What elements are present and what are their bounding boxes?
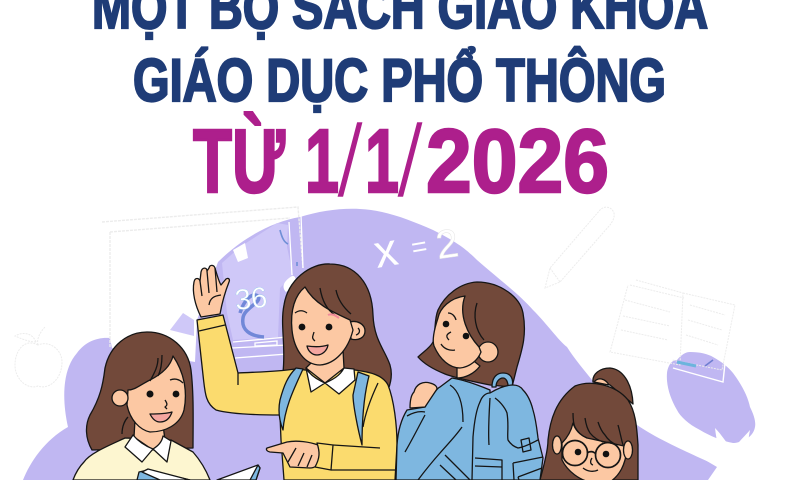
backpack bbox=[472, 385, 543, 480]
mouth bbox=[307, 345, 328, 355]
title line 2: GIÁO DỤC PHỔ THÔNG bbox=[133, 47, 666, 114]
face bbox=[562, 423, 627, 480]
collar bbox=[306, 368, 355, 394]
eyes bbox=[146, 390, 179, 398]
hair bbox=[418, 282, 524, 387]
title date: 1 bbox=[305, 112, 339, 212]
pointing hand bbox=[266, 441, 321, 468]
ear bbox=[350, 321, 365, 340]
face bbox=[292, 287, 353, 365]
neck bbox=[306, 350, 344, 383]
faint doodles bbox=[15, 207, 735, 387]
doodle: open book bbox=[610, 280, 735, 370]
student: middle girl raising hand bbox=[193, 264, 397, 480]
hair bbox=[86, 332, 193, 450]
sweater bbox=[73, 438, 210, 480]
ears bbox=[552, 436, 562, 454]
title date: / bbox=[396, 103, 425, 220]
chalk formula: = bbox=[409, 231, 430, 263]
eyes bbox=[575, 449, 609, 457]
doodle: apple bbox=[15, 327, 62, 387]
face bbox=[433, 296, 481, 368]
ear bbox=[478, 342, 498, 362]
title date: / bbox=[336, 103, 365, 220]
title date: TỪ bbox=[193, 111, 285, 212]
open book bbox=[137, 465, 260, 480]
student: left girl with book bbox=[73, 332, 260, 480]
blue jacket bbox=[396, 378, 490, 480]
backpack handle bbox=[492, 373, 513, 387]
chalkboard bbox=[102, 207, 303, 358]
mouth bbox=[150, 412, 172, 422]
title date: 1 bbox=[365, 112, 399, 212]
hair bun bbox=[593, 368, 633, 404]
collar bbox=[125, 435, 171, 462]
title date bbox=[193, 103, 609, 220]
hair bbox=[283, 264, 391, 390]
doodle: pencil bbox=[545, 207, 614, 288]
eyes bbox=[299, 324, 332, 330]
hair bbox=[540, 383, 638, 480]
hand on strap bbox=[410, 382, 437, 408]
student: girl with glasses bbox=[540, 368, 638, 480]
chalk formula: x bbox=[370, 223, 401, 278]
neck bbox=[457, 358, 480, 378]
title bbox=[92, 0, 708, 220]
background purple blobs bbox=[23, 209, 755, 480]
chalk formula: 2 bbox=[433, 221, 461, 268]
chalk numbers: 36 bbox=[233, 282, 269, 317]
chalk formula bbox=[370, 221, 461, 278]
cuff bbox=[315, 443, 333, 470]
title date: 2026 bbox=[426, 112, 609, 212]
student: right girl with backpack bbox=[396, 282, 543, 480]
backpack straps bbox=[279, 368, 303, 430]
neck bbox=[134, 420, 165, 450]
yellow sweater bbox=[197, 315, 397, 480]
raised hand bbox=[193, 265, 229, 317]
eyes bbox=[443, 321, 469, 339]
glasses bbox=[562, 440, 620, 468]
white star bbox=[700, 428, 763, 480]
ear bbox=[112, 390, 128, 406]
open book lines and pen bbox=[673, 360, 725, 382]
face bbox=[127, 356, 185, 432]
